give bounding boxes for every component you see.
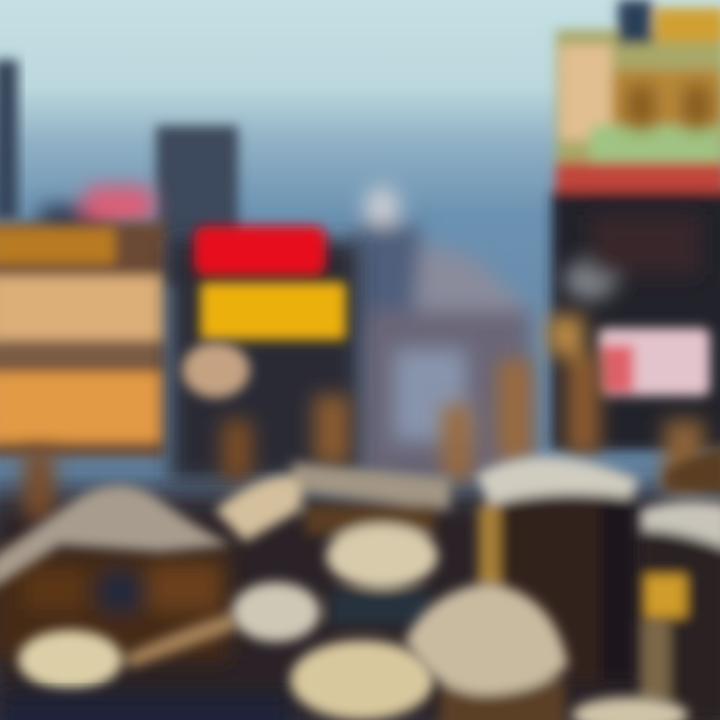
yellow sign: [200, 282, 346, 340]
right billboard details: [564, 85, 710, 300]
navy table base: [0, 695, 290, 720]
pink neon sign: [598, 328, 710, 396]
distant skyline: [355, 186, 530, 480]
dark tower left edge: [0, 60, 18, 220]
pink distant sign: [40, 186, 154, 245]
round lantern: [182, 342, 250, 398]
centre foam coasters: [215, 462, 450, 720]
left orange lit building: [0, 222, 166, 457]
table and lower dark area: [0, 490, 720, 720]
left beer glasses: [0, 550, 230, 660]
bottom foam edge: [572, 697, 688, 720]
central dark building: [170, 240, 360, 480]
far right beer glass: [640, 440, 720, 720]
right tall beer glass: [476, 457, 640, 680]
left glass foam: [0, 485, 235, 690]
background bottles: [24, 315, 704, 520]
right billboard building: [552, 0, 720, 450]
red sign: [194, 226, 326, 276]
front beer glass with foam: [405, 582, 568, 720]
dark central tower: [156, 126, 238, 286]
